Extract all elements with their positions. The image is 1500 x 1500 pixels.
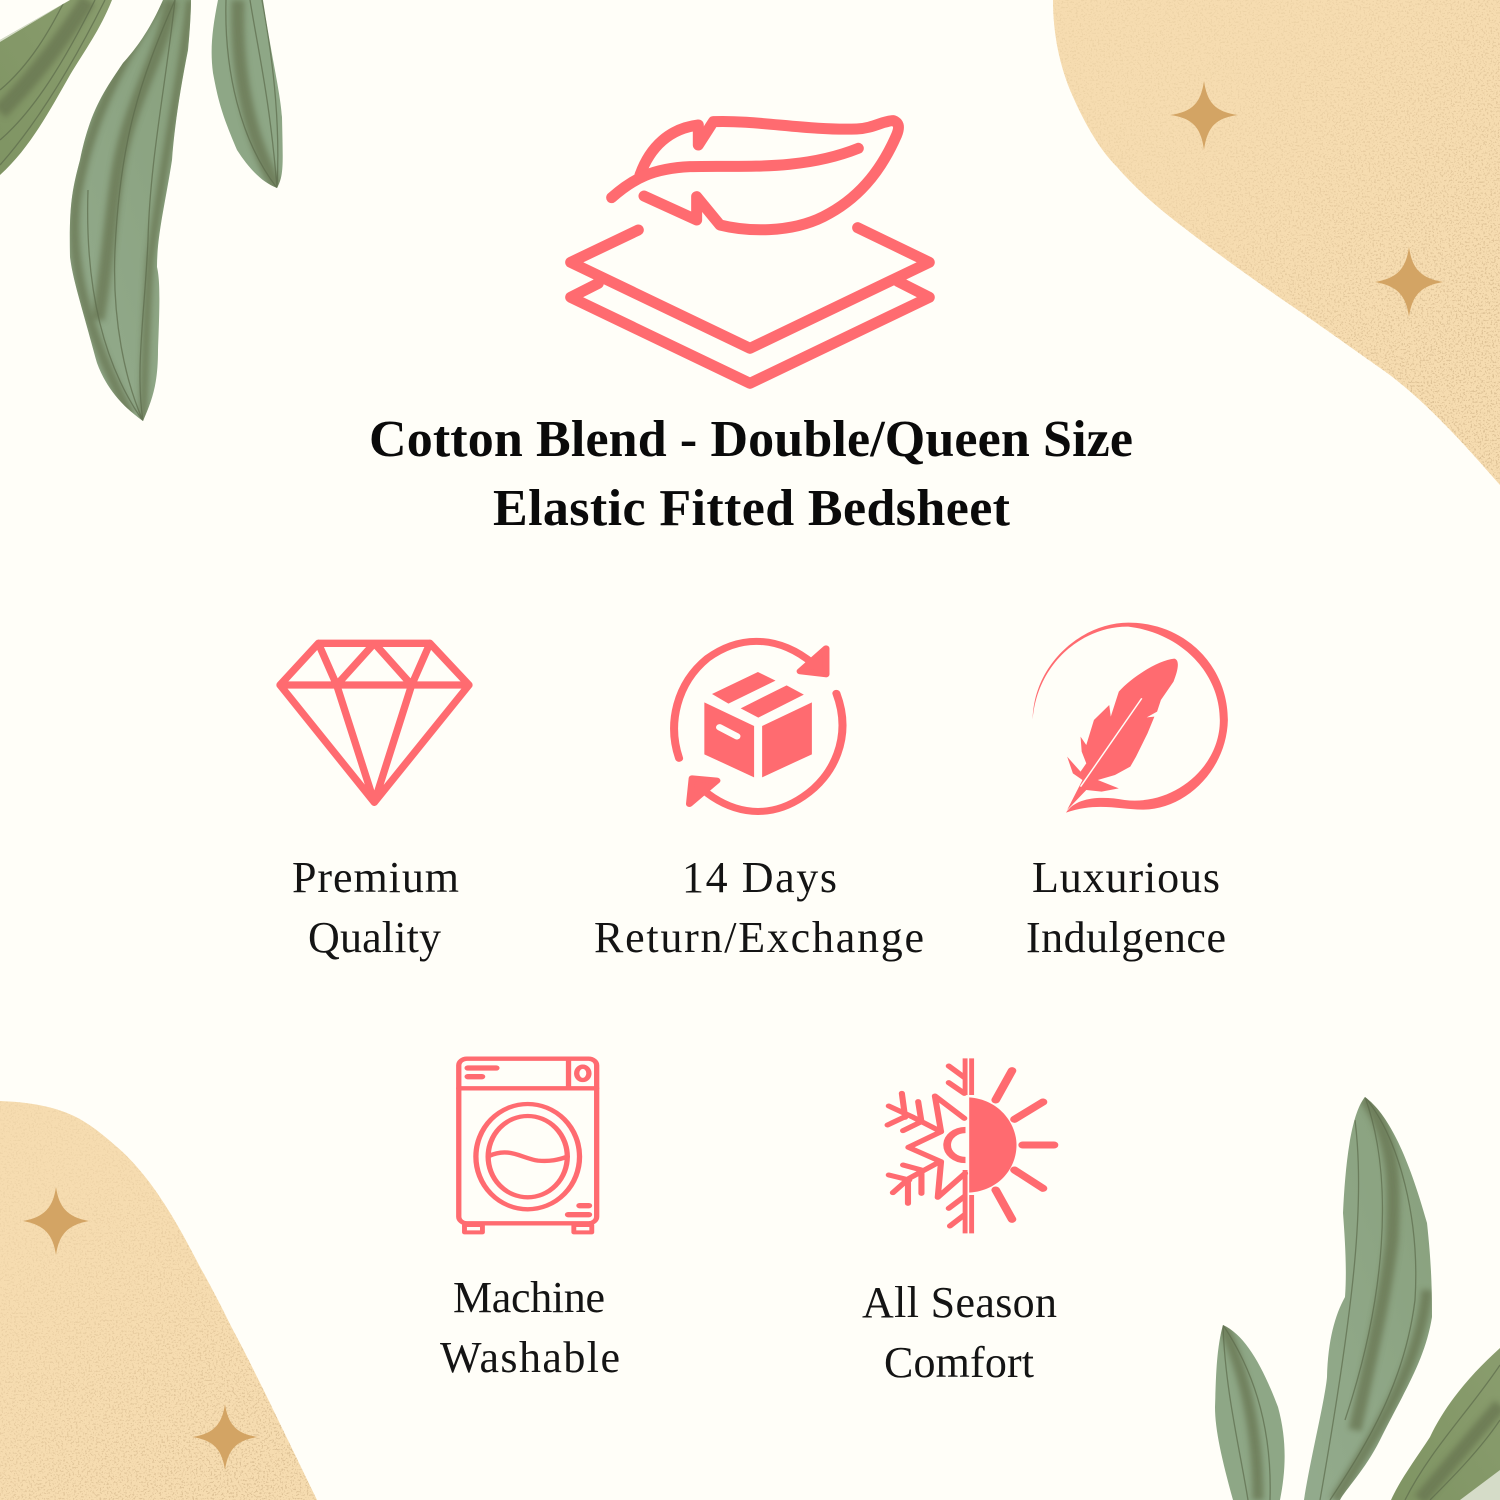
label: luxurious indulgence: Indulgence xyxy=(1026,913,1226,962)
feather outline xyxy=(640,121,899,230)
panel: bottom left sand blob xyxy=(0,1100,320,1500)
icon: sparkle 1 xyxy=(1170,81,1238,150)
return arrows xyxy=(674,641,842,811)
top sheet xyxy=(571,228,929,348)
label: luxurious indulgence xyxy=(1026,853,1226,962)
bottom sheet xyxy=(571,282,929,383)
label: machine washable xyxy=(440,1273,620,1382)
leaf: top left center xyxy=(70,0,191,421)
leaf: bottom right center xyxy=(1304,1097,1432,1500)
label: return exchange: Return/Exchange xyxy=(594,913,924,962)
icon: sparkle 4 xyxy=(192,1404,258,1470)
label: return exchange xyxy=(594,853,924,962)
icon: 14 day return box xyxy=(674,641,842,811)
label: premium quality: Quality xyxy=(308,913,441,962)
label: premium quality xyxy=(292,853,459,962)
icon: feather over layered sheets xyxy=(571,121,929,383)
feather stem xyxy=(612,148,858,198)
icon: feather in circle xyxy=(1033,623,1228,813)
label: luxurious indulgence: Luxurious xyxy=(1032,853,1220,902)
sun half xyxy=(969,1097,1017,1193)
label: all season comfort: Comfort xyxy=(884,1338,1034,1387)
leaf: bottom right outer xyxy=(1390,1340,1500,1500)
label: all season comfort: All Season xyxy=(862,1278,1057,1327)
label: all season comfort xyxy=(862,1278,1057,1387)
label: machine washable: Washable xyxy=(440,1333,620,1382)
snow half xyxy=(888,1058,972,1233)
icon: diamond xyxy=(280,643,469,802)
panel: top right sand blob xyxy=(1050,0,1500,490)
label: machine washable: Machine xyxy=(453,1273,605,1322)
icon: snowflake and sun xyxy=(888,1058,1054,1233)
title xyxy=(369,411,1133,537)
icon: sparkle 3 xyxy=(23,1187,89,1255)
label: premium quality: Premium xyxy=(292,853,459,902)
leaf: bottom right small xyxy=(1215,1325,1285,1500)
title: Elastic Fitted Bedsheet xyxy=(493,480,1011,537)
icon: washing machine xyxy=(459,1059,597,1232)
box xyxy=(704,672,812,777)
leaf: top left outer xyxy=(0,0,120,180)
label: return exchange: 14 Days xyxy=(682,853,837,902)
icon: sparkle 2 xyxy=(1375,247,1443,317)
leaf: top left small xyxy=(212,0,283,188)
title: Cotton Blend - Double/Queen Size xyxy=(369,411,1133,468)
